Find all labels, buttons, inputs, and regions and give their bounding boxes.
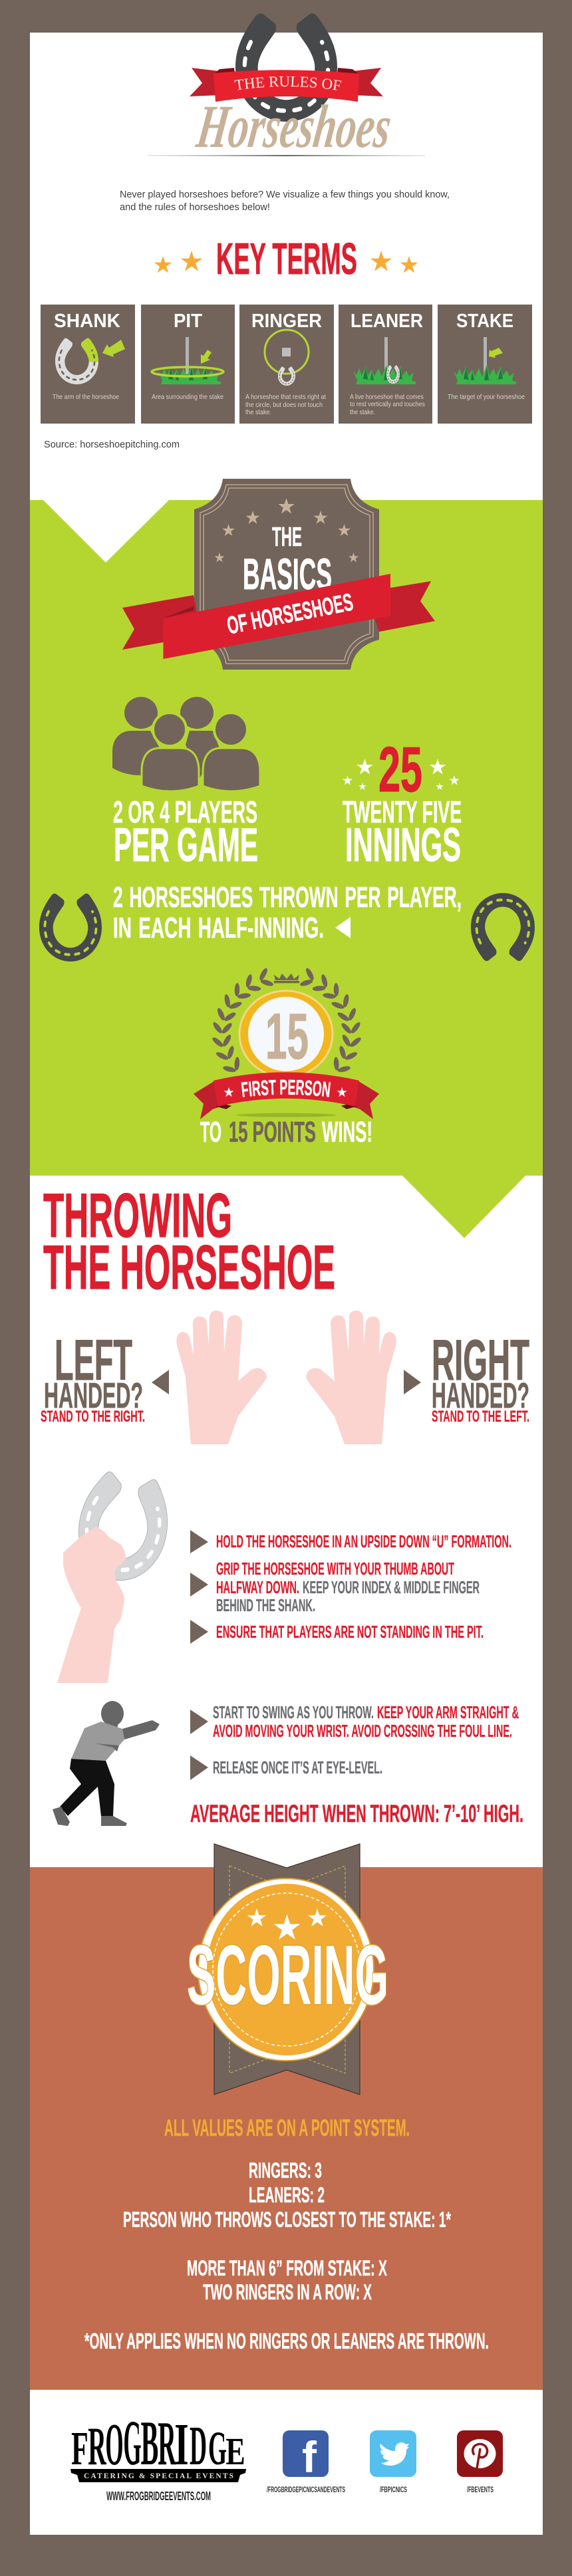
icon: header horseshoe (235, 13, 337, 122)
stat: twenty five innings: INNINGS (345, 819, 461, 872)
icon: left hand (176, 1311, 267, 1444)
ribbon: first person (194, 1072, 379, 1119)
badge: scoring (187, 1844, 388, 2095)
badge: scoring: SCORING (187, 1928, 388, 2022)
icon: person throwing (53, 1701, 160, 1826)
twitter handle: /FBPICNICS (380, 2485, 407, 2494)
icon: shank horseshoe (55, 338, 98, 384)
icon: right horseshoe (471, 893, 535, 961)
icon: pinterest (457, 2430, 503, 2477)
stat: twenty five innings: 25 (378, 734, 422, 805)
script word: Horseshoes: Horseshoes (193, 92, 395, 160)
icon: left horseshoe (39, 894, 102, 962)
text: left handed: HANDED? (44, 1376, 143, 1416)
logo: frogbridge (71, 2408, 246, 2503)
source note: Source: horseshoepitching.com (44, 440, 180, 450)
text: left handed (41, 1329, 145, 1426)
text: left handed: LEFT (55, 1329, 132, 1392)
list: no-score values (187, 2256, 387, 2304)
panel: pit: PIT (174, 311, 202, 332)
arrow bullet (190, 1755, 208, 1780)
logo: frogbridge: I (174, 2412, 189, 2478)
stat: players per game (113, 795, 258, 872)
logo: frogbridge: WWW.FROGBRIDGEEVENTS.COM (106, 2490, 211, 2503)
text: left handed: STAND TO THE RIGHT. (41, 1408, 145, 1426)
panel: pit (141, 305, 235, 424)
intro text: and the rules of horseshoes below! (120, 202, 270, 213)
wreath left branch (210, 966, 275, 1079)
panel: ringer: A horseshoe that rests right at (245, 393, 326, 401)
heading: throwing the horseshoe: THE HORSESHOE (43, 1232, 335, 1302)
logo: frogbridge: O (105, 2411, 124, 2478)
panel: ringer: the circle, but does not touch (245, 401, 323, 409)
award: laurel wreath with 15: 15 (265, 1000, 309, 1073)
stat: twenty five innings: TWENTY FIVE (343, 795, 462, 829)
title ribbon (190, 68, 383, 102)
arrow (102, 340, 125, 357)
ribbon: first person: FIRST PERSON (241, 1080, 331, 1097)
logo: frogbridge: G (123, 2408, 142, 2478)
text: horseshoes thrown per player (113, 881, 462, 944)
step: grip: BEHIND THE SHANK. (216, 1595, 315, 1615)
icon: grass (454, 365, 517, 384)
pinterest handle: /FBEVENTS (467, 2485, 494, 2494)
logo: frogbridge: R (88, 2416, 106, 2476)
text: to 15 points wins: 15 POINTS (229, 1116, 316, 1148)
stat: twenty five innings (343, 734, 462, 872)
text: to 15 points wins: TO (200, 1116, 221, 1148)
heading: throwing the horseshoe: THROWING (43, 1180, 232, 1250)
arrow bullet (190, 1573, 208, 1597)
step: swing: START TO SWING AS YOU THROW. (213, 1702, 374, 1722)
list: no-score values: MORE THAN 6” FROM STAKE: X (187, 2256, 387, 2280)
arrow: right (404, 1370, 421, 1394)
logo: frogbridge: D (190, 2414, 207, 2476)
icon: facebook (283, 2430, 329, 2482)
panel: leaner: A live horseshoe that comes (350, 393, 424, 401)
list: no-score values: TWO RINGERS IN A ROW: X (203, 2280, 372, 2304)
logo: frogbridge: E (225, 2430, 245, 2474)
heading: throwing the horseshoe (43, 1180, 335, 1302)
ribbon: OF HORSESHOES (225, 588, 355, 639)
panel: shank (41, 305, 135, 424)
icon: group of four players (112, 697, 260, 791)
icon: right hand (306, 1311, 396, 1444)
text: horseshoes thrown per player: IN EACH HALF-INNING. (113, 912, 324, 944)
badge: the basics of horseshoes (122, 479, 435, 670)
step: swing (213, 1702, 519, 1741)
logo: frogbridge: R (158, 2408, 176, 2478)
intro text: Never played horseshoes before? We visualize a few things you should know, (120, 190, 450, 200)
list: point values: LEANERS: 2 (249, 2183, 325, 2207)
icon: grass (353, 365, 416, 384)
panel: leaner (339, 305, 432, 424)
arrow: left (152, 1370, 169, 1394)
icon: hand gripping horseshoe (57, 1468, 176, 1683)
arrow (201, 350, 212, 364)
wreath right branch (298, 966, 363, 1079)
logo: frogbridge: G (208, 2422, 227, 2475)
panel: ringer: RINGER (251, 311, 322, 332)
step: grip: HALFWAY DOWN. (216, 1577, 299, 1597)
badge: the basics of horseshoes: THE (272, 521, 302, 552)
panel: ringer (239, 305, 334, 424)
stat: players per game: 2 OR 4 PLAYERS (113, 795, 257, 829)
title block (190, 13, 395, 160)
ribbon (122, 574, 435, 659)
panel: ringer: the stake. (245, 408, 271, 416)
heading: key terms: KEY TERMS (216, 234, 357, 284)
panel: stake: The target of your horseshoe (448, 393, 525, 401)
facebook handle: /FROGBRIDGEPICNICSANDEVENTS (267, 2485, 345, 2494)
heading: key terms (154, 234, 418, 284)
panel: leaner: LEANER (351, 311, 423, 332)
panel: shank: The arm of the horseshoe (53, 393, 119, 401)
title ribbon: THE RULES OF (234, 76, 342, 90)
panel: stake: STAKE (456, 311, 513, 332)
text: to 15 points wins: WINS! (322, 1116, 372, 1148)
arrow bullet (190, 1620, 208, 1644)
panel: stake (438, 305, 532, 424)
panel: leaner: to rest vertically and touches (350, 400, 425, 408)
icon: small horseshoe (278, 366, 295, 386)
arrow bullet (190, 1530, 208, 1553)
logo: frogbridge: B (141, 2408, 158, 2478)
arrow bullet (190, 1710, 208, 1734)
icon: leaning horseshoe (386, 365, 400, 384)
icon: grass pit (158, 365, 221, 384)
panel: the basics green section (30, 500, 543, 1238)
text: right handed (432, 1329, 529, 1426)
panel: leaner: the stake. (350, 408, 375, 416)
icon: facebook: f (302, 2432, 317, 2482)
stat: players per game: PER GAME (114, 819, 258, 872)
award: laurel wreath with 15 (194, 968, 379, 1119)
crown (274, 973, 299, 983)
step: grip (216, 1559, 480, 1615)
panel: scoring section (30, 1867, 543, 2390)
intro text (120, 190, 450, 213)
logo: frogbridge: F (71, 2421, 88, 2475)
logo: frogbridge: CATERING & SPECIAL EVENTS (84, 2472, 233, 2480)
arrow (489, 348, 503, 358)
list: point values: RINGERS: 3 (249, 2158, 322, 2182)
badge: the basics of horseshoes: BASICS (243, 549, 332, 598)
step: release: RELEASE ONCE IT’S AT EYE-LEVEL. (213, 1757, 382, 1777)
list: point values (123, 2158, 451, 2232)
icon: twitter (370, 2430, 416, 2477)
panel: pit: Area surrounding the stake (152, 393, 223, 401)
panel: shank: SHANK (54, 311, 120, 332)
